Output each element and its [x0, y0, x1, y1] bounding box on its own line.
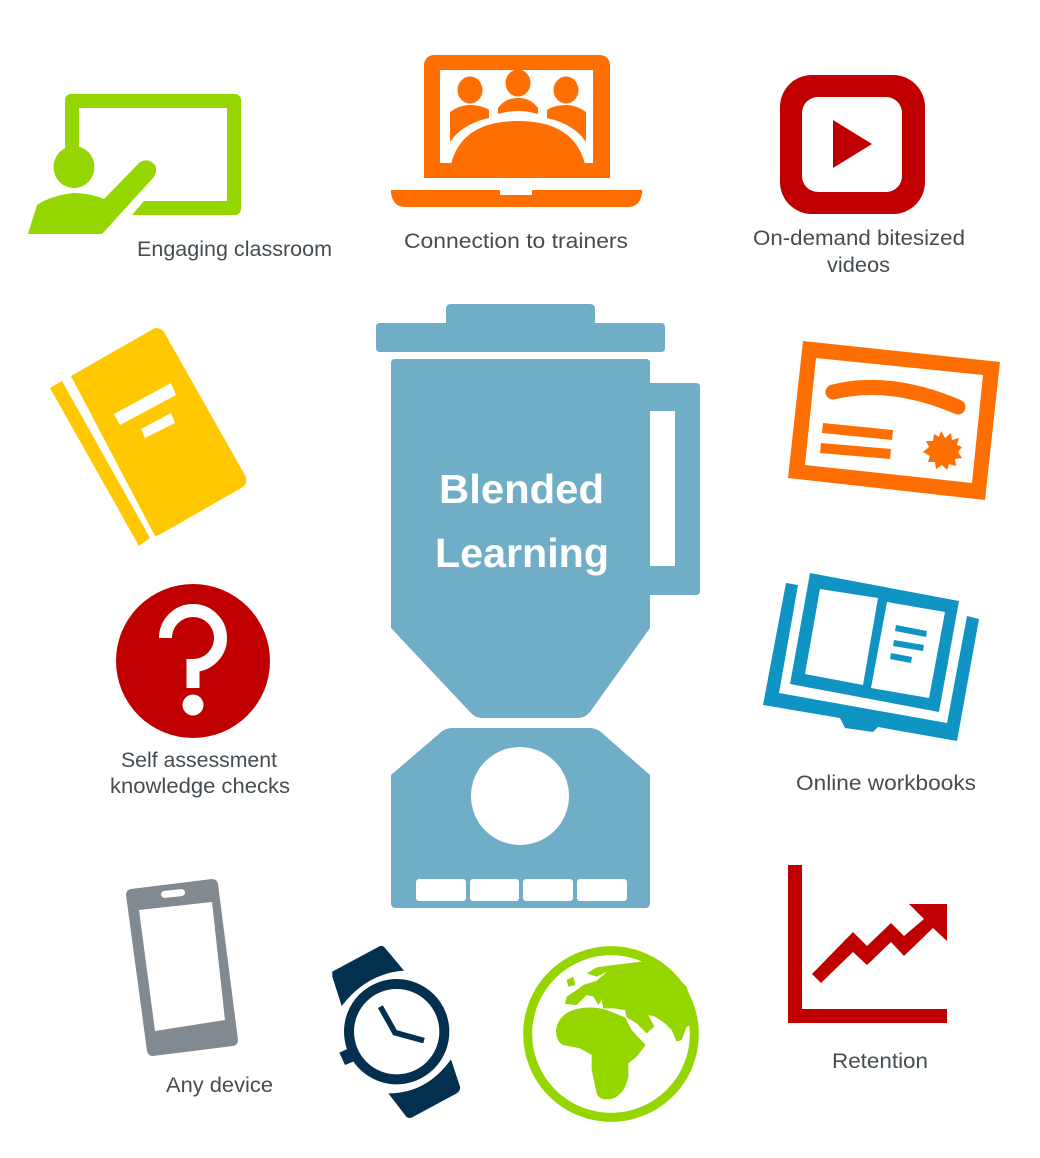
- blender title: Learning: [435, 530, 609, 576]
- blender title: [435, 466, 609, 576]
- blender buttons: [416, 879, 627, 901]
- label: self assessment knowledge checks: [110, 749, 290, 798]
- label: on-demand bitesized videos: [753, 227, 965, 277]
- label: self assessment knowledge checks: knowledge checks: [110, 775, 290, 798]
- icon: mobile phone: [126, 879, 238, 1056]
- label: any device: Any device: [166, 1074, 273, 1097]
- label: engaging classroom: Engaging classroom: [137, 238, 332, 261]
- blender jar with handle: [391, 359, 700, 718]
- label: on-demand bitesized videos: videos: [827, 254, 890, 277]
- blender base: [391, 728, 650, 908]
- icon: online workbook: [763, 573, 979, 741]
- icon: retention line chart: [788, 865, 947, 1023]
- blender lid: [376, 304, 665, 352]
- label: connection to trainers: Connection to trainers: [404, 230, 628, 253]
- icon: wrist watch: [332, 946, 460, 1118]
- blender illustration: [376, 304, 700, 908]
- icon: teacher at classroom board: [28, 94, 241, 234]
- label: online workbooks: Online workbooks: [796, 772, 976, 795]
- icon: video play button: [780, 75, 925, 214]
- label: retention: Retention: [832, 1050, 928, 1073]
- icon: laptop with trainers: [391, 55, 642, 207]
- icon: orange certificate: [788, 341, 1000, 500]
- icon: question mark: [116, 584, 270, 738]
- blender title: Blended: [439, 466, 604, 512]
- icon: yellow notebook: [50, 328, 246, 546]
- icon: globe: [528, 951, 695, 1117]
- label: self assessment knowledge checks: Self assessment: [121, 749, 277, 772]
- label: on-demand bitesized videos: On-demand bitesized: [753, 227, 965, 250]
